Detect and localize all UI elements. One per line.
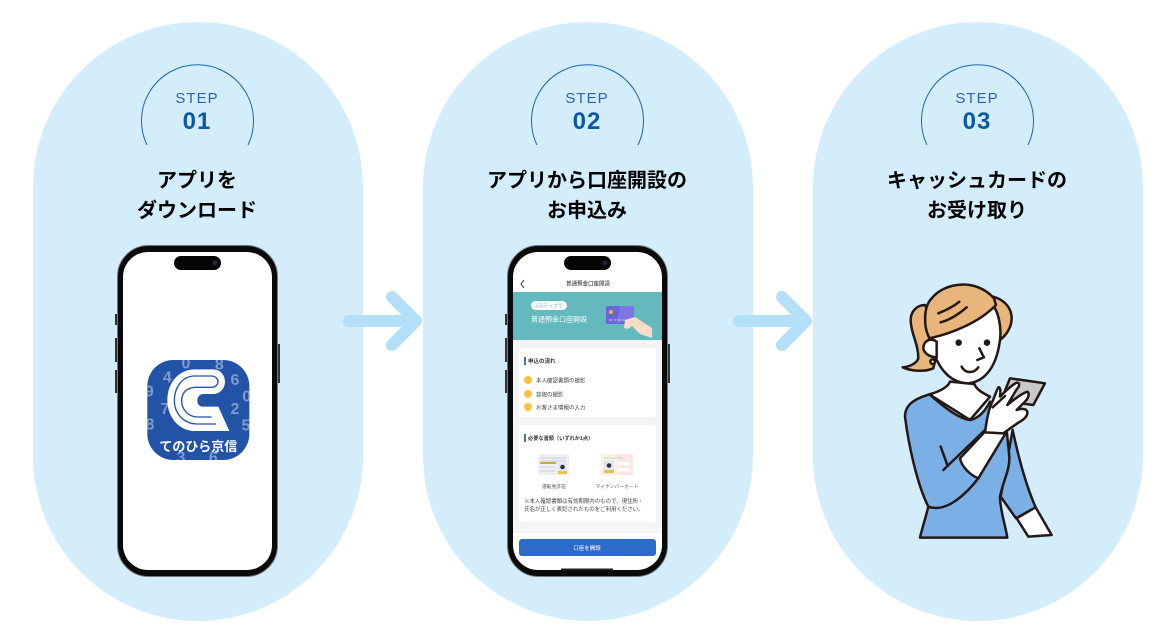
step 2 heading: お申込み xyxy=(547,199,627,222)
teal banner: 3ステップで xyxy=(535,304,563,310)
panel: step 2 xyxy=(423,22,753,621)
card: required documents xyxy=(519,425,656,522)
app icon: 7 xyxy=(161,401,170,418)
phone with app icon xyxy=(115,246,280,576)
step 2 badge: 02 xyxy=(573,108,601,135)
button: open account xyxy=(519,539,656,556)
card: application flow: 容貌の撮影 xyxy=(536,390,564,398)
step 1 heading: アプリを xyxy=(157,170,237,192)
card: application flow: お客さま情報の入力 xyxy=(536,404,586,412)
phone with account opening screen xyxy=(505,246,670,576)
app icon: 8 xyxy=(215,357,224,374)
app icon: 9 xyxy=(145,383,154,400)
icon: driver's licence xyxy=(538,454,569,475)
illustration: woman using smartphone xyxy=(903,285,1052,538)
screen header: 普通預金口座開設 xyxy=(566,280,610,288)
app icon: 0 xyxy=(242,389,251,406)
app icon: 3 xyxy=(177,449,186,466)
step 3 badge: STEP xyxy=(955,90,999,107)
step 3 badge xyxy=(922,65,1034,145)
panel: step 3 xyxy=(813,22,1143,621)
button: open account: 口座を開設 xyxy=(573,545,601,552)
card: application flow xyxy=(519,348,656,417)
app icon: てのひら京信 xyxy=(159,439,237,454)
icon: my number card xyxy=(601,454,633,475)
card: required documents: マイナンバーカード xyxy=(595,484,639,490)
step 1 heading: ダウンロード xyxy=(137,198,257,222)
card: application flow: 申込の流れ xyxy=(528,357,556,365)
teal banner: 普通預金口座開設 xyxy=(531,314,587,324)
app icon: 4 xyxy=(163,369,172,386)
app icon: 2 xyxy=(231,401,240,418)
gray content area xyxy=(513,340,662,533)
screen header xyxy=(521,280,610,288)
step 3 badge: 03 xyxy=(963,108,991,135)
step 2 badge: STEP xyxy=(565,90,609,107)
step 2 heading: アプリから口座開設の xyxy=(487,170,687,192)
app icon: 0 xyxy=(182,355,191,372)
arrow: step 1 to 2 xyxy=(349,297,416,345)
arrow: step 2 to 3 xyxy=(739,297,806,345)
step 1 badge: 01 xyxy=(183,108,211,135)
app icon: 6 xyxy=(231,372,240,389)
panel: step 1 xyxy=(33,22,363,621)
app icon: 5 xyxy=(242,418,251,435)
app icon xyxy=(147,360,250,460)
step 2 badge xyxy=(532,65,644,145)
step 3 heading: お受け取り xyxy=(927,199,1027,222)
card: required documents: 必要な書類（いずれか1点） xyxy=(528,434,593,442)
card: required documents: 運転免許証 xyxy=(542,483,566,490)
teal banner xyxy=(513,292,662,340)
app icon: 8 xyxy=(146,417,155,434)
app icon: 6 xyxy=(209,449,218,466)
card: application flow: 本人確認書類の撮影 xyxy=(536,376,586,384)
card: required documents: 氏名が正しく表記されたものをご利用ください。 xyxy=(524,505,644,513)
step 1 badge: STEP xyxy=(175,90,219,107)
card: required documents: ※本人確認書類は有効期限内のもので、現住所・ xyxy=(524,497,643,505)
step 1 badge xyxy=(142,65,254,145)
step 3 heading: キャッシュカードの xyxy=(887,170,1067,192)
